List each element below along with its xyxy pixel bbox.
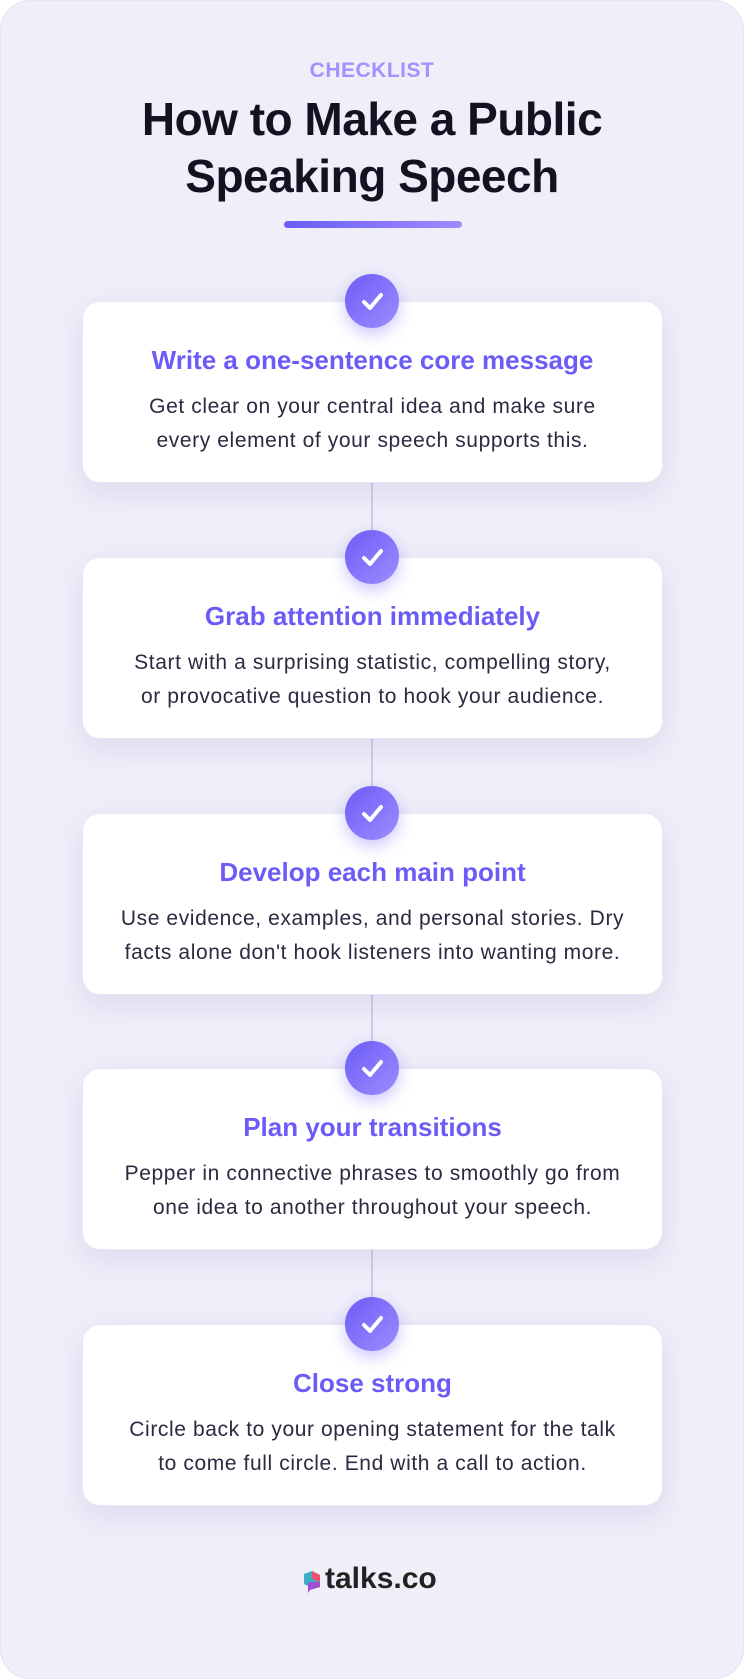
- card 4: Pepper in connective phrases to smoothly go from: [125, 1162, 620, 1185]
- icon: check 5: [345, 1297, 399, 1351]
- icon: check 3: [345, 786, 399, 840]
- card 2: Start with a surprising statistic, compelling story,: [134, 651, 611, 674]
- title: Speaking Speech: [185, 150, 559, 202]
- card 3: facts alone don't hook listeners into wanting more.: [125, 941, 620, 964]
- icon: check 4: [345, 1041, 399, 1095]
- card 3: Use evidence, examples, and personal stories. Dry: [121, 907, 624, 930]
- logo: talks.co: talks.co: [325, 1562, 437, 1595]
- card 4: Plan your transitions: [243, 1112, 502, 1142]
- card 2: [82, 557, 663, 739]
- card 5: to come full circle. End with a call to action.: [158, 1452, 587, 1475]
- title underline: [284, 221, 462, 228]
- card 2: Grab attention immediately: [205, 601, 540, 631]
- card 1: [82, 301, 663, 483]
- card 1: Get clear on your central idea and make sure: [149, 395, 596, 418]
- card 1: Write a one-sentence core message: [152, 345, 593, 375]
- card 3: [82, 813, 663, 995]
- card 2: or provocative question to hook your audience.: [141, 685, 604, 708]
- card 1: every element of your speech supports this.: [156, 429, 588, 452]
- title: [142, 93, 602, 202]
- card 5: Circle back to your opening statement for the talk: [129, 1418, 616, 1441]
- card 3: Develop each main point: [219, 857, 526, 887]
- icon: check 1: [345, 274, 399, 328]
- eyebrow: checklist: CHECKLIST: [310, 59, 434, 82]
- title: How to Make a Public: [142, 93, 602, 145]
- card 4: one idea to another throughout your speech.: [153, 1196, 592, 1219]
- card 5: [82, 1324, 663, 1506]
- icon: check 2: [345, 530, 399, 584]
- card 4: [82, 1068, 663, 1250]
- card 5: Close strong: [293, 1368, 452, 1398]
